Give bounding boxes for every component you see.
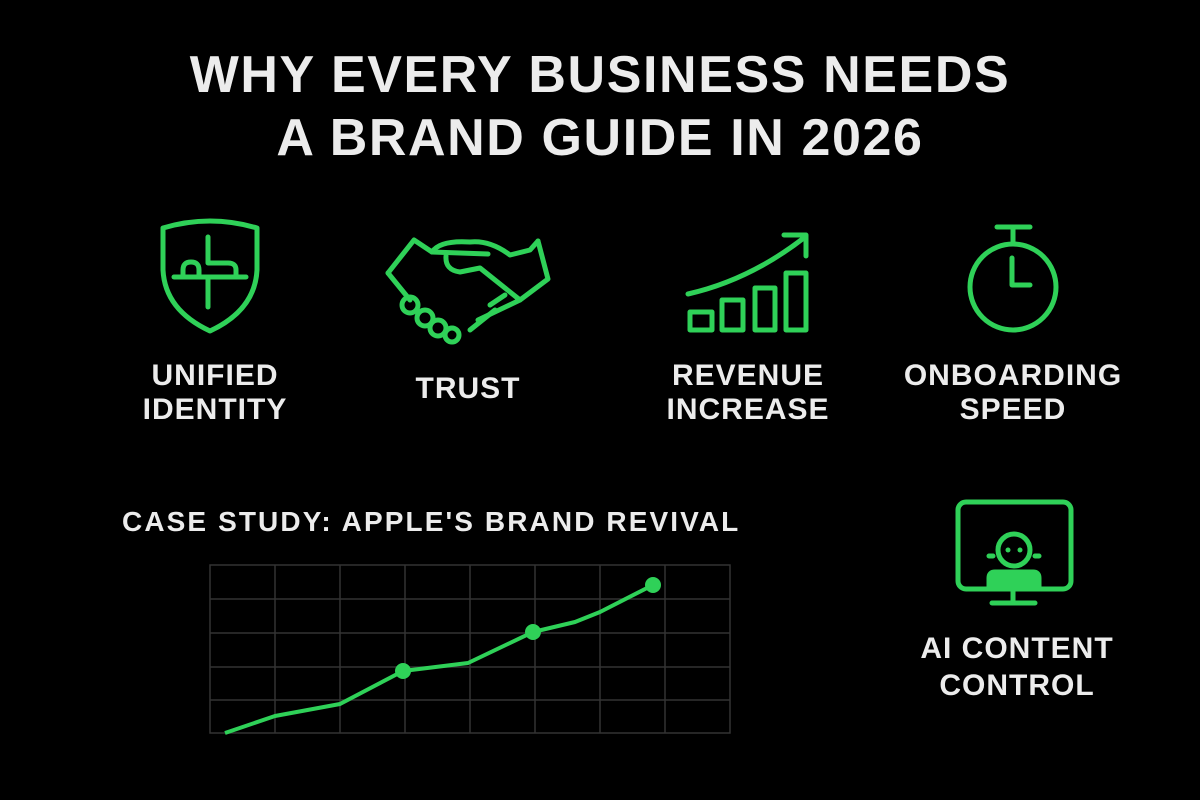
label: ai content control: AI CONTENT [920, 632, 1114, 665]
label: revenue increase: REVENUE [672, 359, 824, 392]
icon: stopwatch [968, 224, 1058, 332]
label: unified identity: IDENTITY [143, 393, 287, 426]
label: trust: TRUST [416, 372, 520, 405]
title: WHY EVERY BUSINESS NEEDS [190, 46, 1010, 104]
icon: shield [160, 218, 260, 334]
icon: AI monitor [956, 500, 1074, 606]
label: unified identity [143, 359, 287, 426]
label: revenue increase [666, 359, 830, 426]
label: onboarding speed: SPEED [960, 393, 1066, 426]
label: ai content control [920, 632, 1114, 702]
line chart [209, 564, 731, 735]
icon: handshake [386, 237, 550, 344]
label: ai content control: CONTROL [939, 669, 1095, 702]
label: unified identity: UNIFIED [152, 359, 278, 392]
label: onboarding speed [904, 359, 1122, 426]
label: revenue increase: INCREASE [666, 393, 830, 426]
case study heading: CASE STUDY: APPLE'S BRAND REVIVAL [122, 506, 740, 537]
icon: revenue chart [686, 232, 808, 332]
label: onboarding speed: ONBOARDING [904, 359, 1122, 392]
title [190, 46, 1010, 167]
title: A BRAND GUIDE IN 2026 [276, 109, 924, 167]
